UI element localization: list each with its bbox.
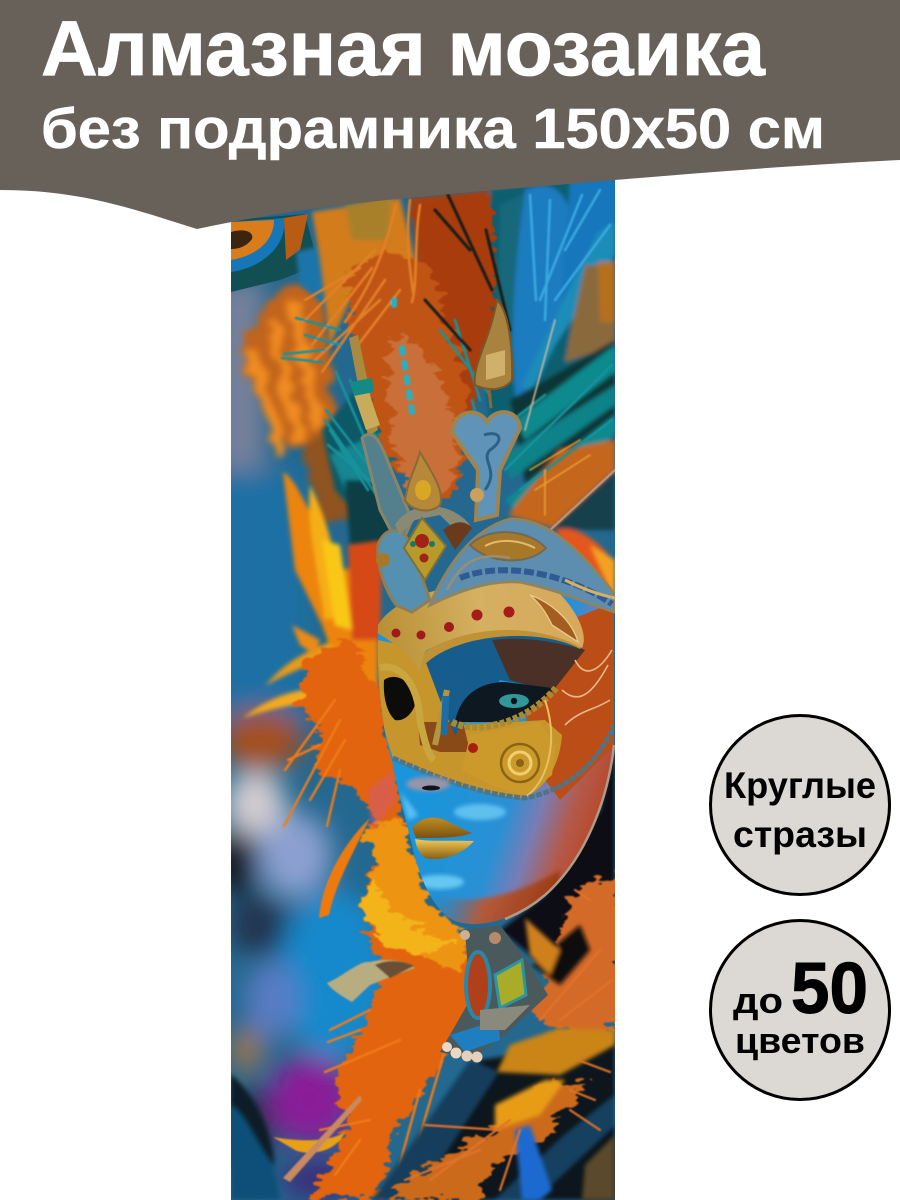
large orange boa — [300, 640, 475, 1200]
face highlights — [406, 777, 450, 791]
central diamond — [404, 518, 446, 580]
badge: round rhinestones: стразы — [733, 814, 867, 855]
mask face and gold half-mask — [376, 577, 620, 930]
feather strokes — [282, 190, 615, 532]
header band — [0, 0, 900, 229]
blue zone under brow — [425, 632, 585, 735]
badge: up to 50 colours: до — [733, 980, 783, 1021]
mosaic picture: carnival mask — [214, 175, 620, 1200]
bottom filaments, small feather and thin stick — [405, 890, 612, 1190]
badge: round rhinestones: Круглые — [724, 765, 876, 806]
open loops — [395, 506, 470, 535]
lips — [412, 818, 472, 838]
subtitle: без подрамника 150х50 см — [41, 97, 825, 161]
left yellow feather — [243, 472, 382, 718]
right rim — [505, 745, 614, 919]
forehead gold — [376, 577, 584, 672]
swirl — [501, 744, 539, 782]
right lobed crest — [452, 412, 520, 520]
necklace brooch — [440, 925, 548, 1062]
gold bud ornament — [475, 300, 512, 408]
top centre and right feather mass — [312, 175, 615, 612]
dark lower right area — [372, 745, 615, 1200]
peacock eye, top left — [231, 214, 330, 310]
boa filaments — [284, 700, 445, 1200]
badge: up to 50 colours: 50 — [791, 949, 868, 1029]
left wing — [378, 530, 430, 612]
gold brow and eye rims — [418, 631, 582, 665]
badge: up to 50 colours — [710, 920, 890, 1100]
right wing — [430, 519, 615, 612]
lower right orange feathers — [385, 870, 620, 1200]
badge: round rhinestones — [710, 716, 890, 894]
blurred background — [231, 281, 382, 1200]
flower ornament — [405, 452, 441, 510]
central orange tuft — [345, 195, 498, 500]
left blurred orange feathers — [242, 286, 370, 520]
beaded crown — [362, 412, 615, 612]
gold half-mask — [376, 640, 562, 798]
right orange cheek of the half-mask — [525, 608, 614, 800]
title: Алмазная мозаика — [41, 4, 766, 92]
badge: up to 50 colours: цветов — [735, 1020, 865, 1061]
left prong — [362, 434, 412, 548]
gold staff left of crown — [349, 335, 380, 436]
eyes — [384, 677, 417, 720]
